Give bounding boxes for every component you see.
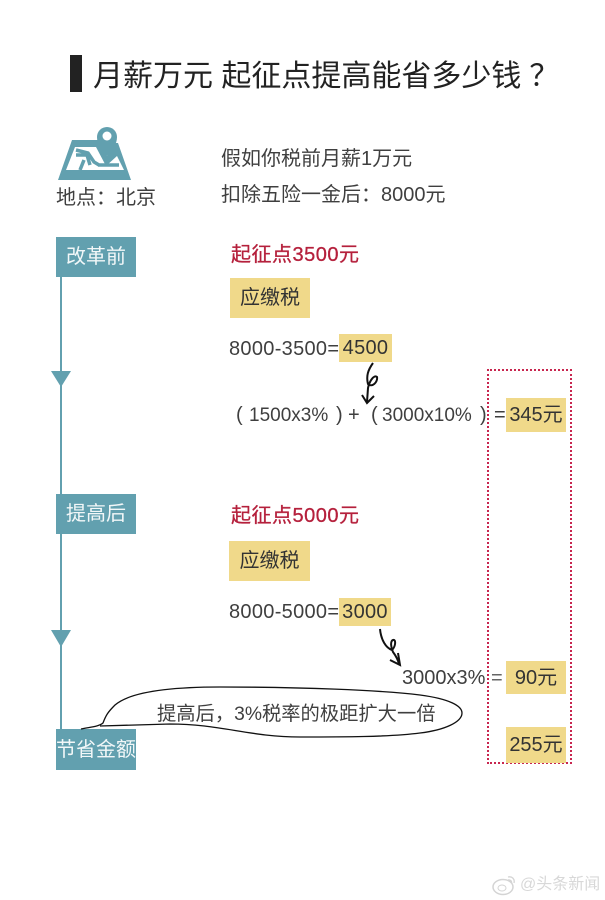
- threshold 5000 heading: 起征点5000元: [231, 505, 360, 527]
- intro text line 1: 假如你税前月薪1万元: [221, 148, 412, 170]
- result highlight 3000: [339, 598, 391, 626]
- formula 8000-5000: 8000-5000=: [229, 601, 339, 623]
- result highlight 4500: 4500: [343, 337, 388, 359]
- watermark text: @头条新闻: [520, 876, 600, 893]
- tax formula before reform: ): [480, 404, 487, 426]
- formula 8000-3500: 8000-3500=: [229, 338, 339, 360]
- result highlight 4500: [339, 334, 392, 362]
- tax formula before reform: [236, 404, 506, 426]
- watermark: [492, 876, 600, 896]
- step label: after raise: [56, 494, 136, 534]
- tax formula before reform: 3000x10%: [382, 405, 472, 426]
- formula 3000x3%: 3000x3%: [402, 667, 485, 689]
- tax due tag 2: 应缴税: [240, 550, 300, 572]
- tax due tag 1: 应缴税: [240, 287, 300, 309]
- tax formula before reform: ): [336, 404, 343, 426]
- icon: map with pin: [58, 127, 131, 180]
- result highlight 90: [506, 661, 566, 694]
- result highlight 255: [506, 727, 566, 763]
- location label: 地点：北京: [56, 181, 156, 210]
- tax formula before reform: (: [236, 404, 243, 426]
- step label: savings: [56, 729, 136, 770]
- result highlight 345: [506, 398, 566, 432]
- tax formula before reform: =: [494, 404, 506, 426]
- title: 月薪万元 起征点提高能省多少钱 ？: [93, 51, 559, 95]
- tax due tag 1: [230, 278, 310, 318]
- hand-drawn arrow 1: [361, 362, 378, 405]
- equals sign: =: [491, 667, 503, 689]
- result highlight 3000: 3000: [342, 601, 388, 623]
- icon: weibo logo: [492, 876, 515, 896]
- result highlight 90: 90元: [515, 666, 557, 688]
- result highlight 345: 345元: [509, 404, 563, 426]
- speech bubble callout: [80, 686, 463, 738]
- result highlight 255: 255元: [509, 734, 563, 756]
- step label: before reform: 改革前: [66, 246, 126, 268]
- hand-drawn arrow 2: [379, 628, 402, 667]
- threshold 3500 heading: 起征点3500元: [231, 244, 360, 266]
- timeline line and arrows: [51, 277, 71, 729]
- tax formula before reform: (: [371, 404, 378, 426]
- title bar marker: [70, 55, 82, 92]
- step label: before reform: [56, 237, 136, 277]
- tax due tag 2: [229, 541, 310, 581]
- intro text line 2: 扣除五险一金后：8000元: [221, 178, 446, 207]
- tax formula before reform: 1500x3%: [249, 405, 328, 426]
- dotted result frame: [487, 369, 572, 764]
- tax formula before reform: +: [348, 404, 360, 426]
- step label: after raise: 提高后: [66, 503, 126, 525]
- callout text: 提高后，3%税率的极距扩大一倍: [157, 698, 436, 726]
- step label: savings: 节省金额: [56, 738, 136, 760]
